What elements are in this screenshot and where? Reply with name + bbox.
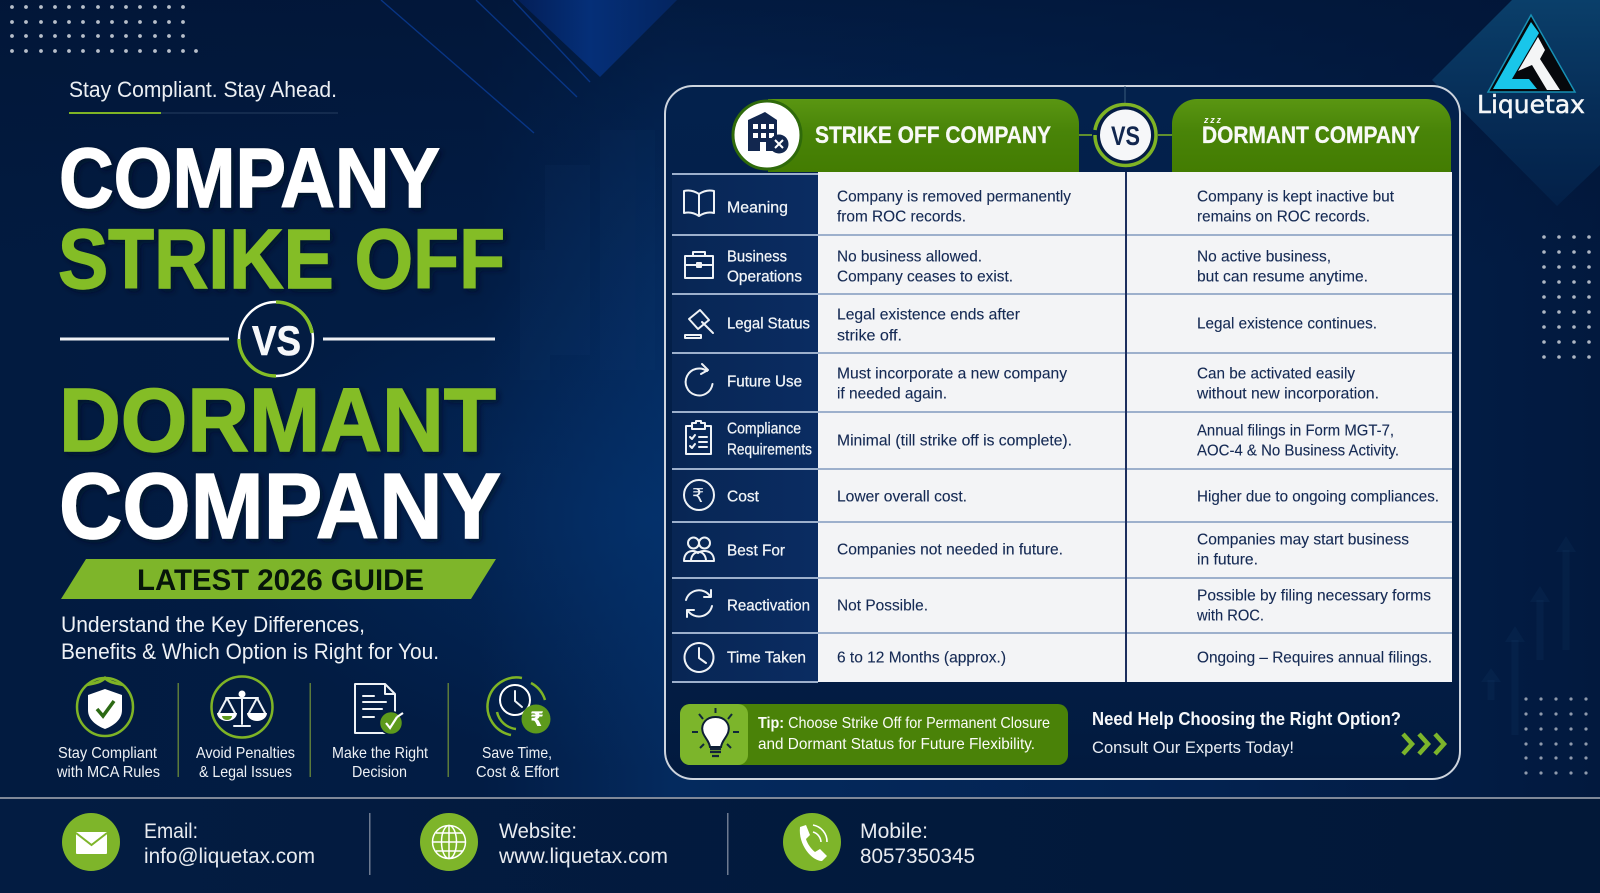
row: meaning: Company is kept inactive but: [1197, 188, 1395, 205]
row: cost: Higher due to ongoing compliances.: [1197, 488, 1439, 505]
row: business operations: Business: [727, 248, 787, 265]
row: future use: if needed again.: [837, 385, 947, 402]
vs badge: VS: [1111, 121, 1140, 151]
row: time taken: Ongoing – Requires annual filings.: [1197, 649, 1432, 666]
dot pattern: lower right: [1524, 697, 1588, 775]
row: future use: Future Use: [727, 373, 802, 390]
row: time taken: Time Taken: [727, 649, 806, 666]
footer: [0, 797, 1600, 893]
logo: Liquetax: Liquetax: [1477, 90, 1585, 119]
row: compliance requirements: Compliance: [727, 420, 801, 437]
header: dormant: zzz: [1203, 115, 1222, 125]
VS divider: [60, 302, 495, 376]
row: business operations: [685, 248, 1368, 285]
icon: refresh: [686, 364, 712, 395]
VS divider: VS: [252, 317, 301, 364]
icon: checklist: [686, 421, 711, 454]
tip box: Tip: Choose Strike Off for Permanent Closure: [758, 715, 1050, 732]
icon: rupee: ₹: [692, 485, 704, 507]
logo: Liquetax: [1477, 15, 1585, 119]
main title: DORMANT: [59, 371, 496, 471]
header: strike off: STRIKE OFF COMPANY: [815, 122, 1051, 149]
benefit: avoid penalties: & Legal Issues: [199, 764, 292, 781]
benefit: avoid penalties: [196, 676, 295, 781]
icon: people: [684, 538, 714, 561]
subheading: Benefits & Which Option is Right for You.: [61, 639, 439, 664]
icon: clock: [685, 643, 714, 672]
contact: mobile: [783, 813, 975, 871]
call to action: Consult Our Experts Today!: [1092, 738, 1294, 757]
row: meaning: [684, 188, 1395, 225]
row: best for: Companies may start business: [1197, 531, 1409, 548]
benefit: stay compliant: with MCA Rules: [56, 764, 160, 781]
row: best for: Companies not needed in future.: [837, 541, 1063, 558]
benefit: avoid penalties: Avoid Penalties: [196, 745, 295, 762]
benefit: stay compliant: Stay Compliant: [58, 745, 157, 762]
icon: building with cross: [733, 101, 801, 169]
tagline: Stay Compliant. Stay Ahead.: [69, 77, 337, 102]
icon: scales: [212, 676, 272, 738]
row: legal status: strike off.: [837, 327, 902, 344]
row: business operations: Operations: [727, 268, 802, 285]
benefit: stay compliant: [56, 677, 160, 781]
row: meaning: remains on ROC records.: [1197, 208, 1370, 225]
row: legal status: Legal existence continues.: [1197, 315, 1377, 332]
main title: STRIKE OFF: [58, 212, 505, 306]
header: dormant: [1172, 99, 1451, 172]
arrow: chevrons: [1403, 734, 1444, 754]
row: reactivation: Reactivation: [727, 597, 810, 614]
icon: sync arrows: [686, 590, 712, 617]
table body: [672, 172, 1452, 683]
dot pattern: top left: [10, 5, 198, 53]
row: time taken: [685, 643, 1432, 672]
row: meaning: Meaning: [727, 199, 788, 216]
row: legal status: Legal existence ends after: [837, 306, 1021, 323]
row: compliance requirements: Minimal (till strike off is complete).: [837, 432, 1072, 449]
benefit: save time: Save Time,: [482, 745, 552, 762]
row: legal status: [685, 306, 1377, 344]
row: future use: Must incorporate a new company: [837, 365, 1067, 382]
comparison panel: [665, 86, 1460, 779]
main title: COMPANY: [59, 454, 501, 558]
icon: book: [684, 190, 714, 216]
row: compliance requirements: AOC-4 & No Business Activity.: [1197, 442, 1399, 459]
row: future use: [686, 364, 1379, 402]
row: compliance requirements: [686, 420, 1399, 459]
logo backdrop diamond: [1432, 0, 1600, 206]
contact: website: [420, 813, 668, 871]
row: time taken: 6 to 12 Months (approx.): [837, 649, 1006, 666]
benefit: right decision: [332, 684, 428, 781]
contact: email: [62, 813, 315, 871]
tip box: and Dormant Status for Future Flexibility.: [758, 736, 1035, 753]
icon: clock and rupee: ₹: [530, 707, 544, 731]
row: cost: Lower overall cost.: [837, 488, 967, 505]
icon: gavel: [685, 310, 713, 338]
contact: website: www.liquetax.com: [498, 845, 668, 868]
row: best for: in future.: [1197, 551, 1258, 568]
contact: website: Website:: [499, 820, 577, 843]
call to action: [1092, 709, 1444, 757]
benefit: right decision: Make the Right: [332, 745, 428, 762]
header: dormant: DORMANT COMPANY: [1202, 122, 1420, 149]
icon: rupee: [684, 480, 714, 510]
contact: mobile: 8057350345: [860, 845, 975, 868]
row: business operations: No active business,: [1197, 248, 1331, 265]
row: business operations: No business allowed.: [837, 248, 982, 265]
row: future use: Can be activated easily: [1197, 365, 1355, 382]
subheading: Understand the Key Differences,: [61, 612, 365, 637]
row: reactivation: Possible by filing necessary forms: [1197, 587, 1431, 604]
row: compliance requirements: Requirements: [727, 441, 812, 458]
contact: email: info@liquetax.com: [144, 845, 315, 868]
vs badge: [1079, 86, 1172, 166]
benefit: save time: Cost & Effort: [476, 764, 560, 781]
row: business operations: but can resume anytime.: [1197, 268, 1368, 285]
row: business operations: Company ceases to exist.: [837, 268, 1013, 285]
row: meaning: Company is removed permanently: [837, 188, 1071, 205]
row: reactivation: with ROC.: [1196, 607, 1264, 624]
benefit: right decision: Decision: [352, 764, 407, 781]
main title: COMPANY: [59, 131, 440, 225]
row: cost: [684, 480, 1439, 510]
icon: document with check: [355, 684, 403, 734]
header: strike off: [733, 99, 1079, 172]
row: cost: Cost: [727, 488, 760, 505]
row: reactivation: [686, 587, 1431, 624]
row: legal status: Legal Status: [727, 315, 810, 332]
icon: briefcase: [685, 252, 713, 278]
row: best for: Best For: [727, 542, 786, 559]
main title: [58, 131, 505, 558]
dot pattern: right: [1542, 235, 1591, 359]
row: reactivation: Not Possible.: [837, 597, 928, 614]
guide banner: LATEST 2026 GUIDE: [137, 564, 424, 597]
contact: email: Email:: [144, 820, 198, 843]
contact: mobile: Mobile:: [860, 820, 928, 843]
guide banner: [61, 559, 496, 599]
row: future use: without new incorporation.: [1196, 385, 1379, 402]
row: compliance requirements: Annual filings in Form MGT-7,: [1197, 422, 1394, 439]
icon: shield: [77, 677, 133, 736]
call to action: Need Help Choosing the Right Option?: [1092, 709, 1401, 729]
subheading: [61, 612, 439, 664]
row: meaning: from ROC records.: [837, 208, 966, 225]
benefit: save time: [476, 677, 560, 781]
row: best for: [684, 531, 1409, 568]
tip box: [680, 704, 1068, 765]
icon: light bulb: [692, 708, 739, 756]
